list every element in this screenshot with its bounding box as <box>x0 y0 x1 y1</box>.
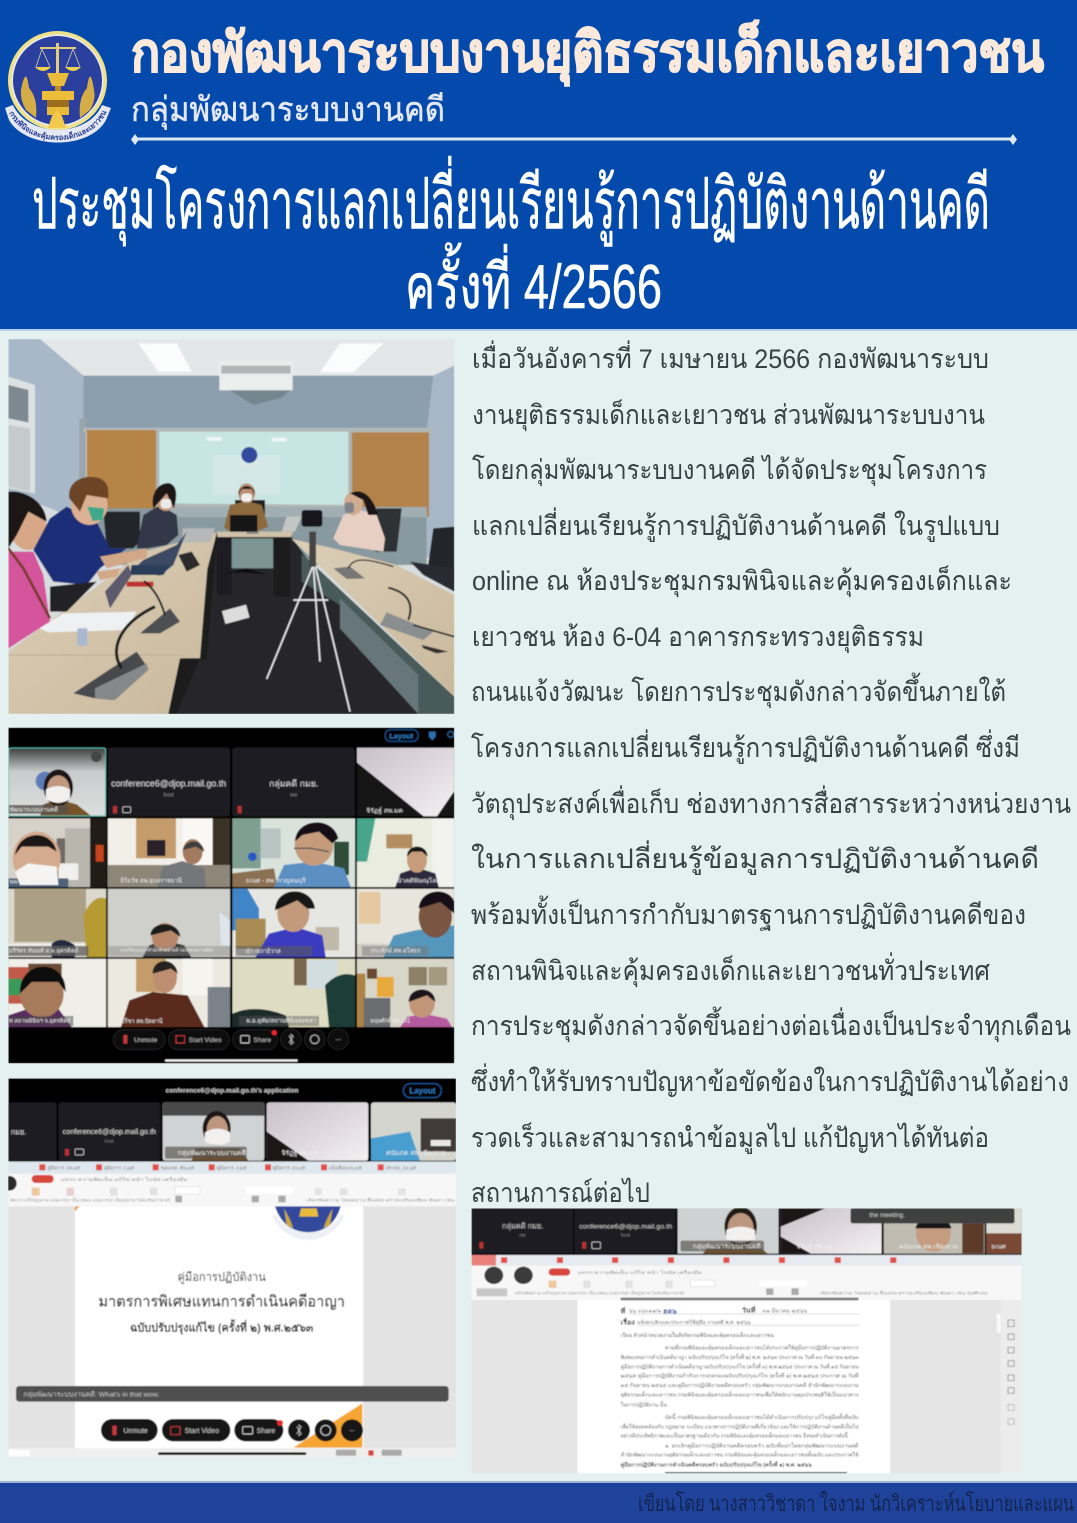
pdf toolbar <box>471 1255 1022 1300</box>
chat caption bar: กลุ่มพัฒนาระบบงานคดี: What's in that wow. <box>23 1390 159 1398</box>
body text: แลกเปลี่ยนเรียนรู้การปฏิบัติงานด้านคดี ในรูปแบบ <box>472 507 1000 542</box>
conference strip: me <box>519 1233 526 1238</box>
body text: พร้อมทั้งเป็นการกำกับมาตรฐานการปฏิบัติงานคดีของ <box>471 895 1026 931</box>
video tiles: ปรีชา สพ.ปัตตานี <box>121 1017 163 1025</box>
photo: meeting room <box>8 339 454 714</box>
body text: ถนนแจ้งวัฒนะ โดยการประชุมดังกล่าวจัดขึ้นภายใต้ <box>471 672 1006 709</box>
tile: case group: กลุ่มคดี กมย. <box>269 778 318 789</box>
call toolbar: Start Video <box>189 1037 222 1044</box>
body text: โดยกลุ่มพัฒนาระบบงานคดี ได้จัดประชุมโครงการ <box>472 455 987 487</box>
tile row 3 <box>8 888 107 958</box>
letter page: คู่มือการปฏิบัติงานการดำเนินคดีครอบครัว ฉบับปรับปรุงแก้ไข (ครั้งที่ ๑) พ.ศ. ๒๕๖๖ <box>621 1460 812 1469</box>
conference strip: กลุ่มพัฒนาระบบงานคดี <box>178 1149 246 1157</box>
video tiles: มนุษศักดิ์ สพ.101 <box>370 1016 411 1025</box>
pdf toolbar: จัดการ แก้ไขรูปภาพ แปลง PDF เป็น Office แปลง PDF เป็นรูปภาพ ไฟล์เสริมการแชร์ <box>10 1197 170 1203</box>
call toolbar: Start Video <box>185 1428 219 1435</box>
tile row 2: พพ สพ.เชียงราย <box>10 878 51 885</box>
conference strip: ธเนศ <box>991 1244 1006 1250</box>
woman right <box>333 510 385 552</box>
call toolbar <box>8 1419 456 1458</box>
pdf toolbar: คู่มือการ .03.pdf <box>273 1164 306 1171</box>
left table <box>8 532 217 714</box>
pdf toolbar: ขอบเขต .ต้น.pdf <box>161 1165 195 1170</box>
letter page: ๒๕๖๕ คู่มือการปฏิบัติงานกำกับการปกครองฉบับปรับปรุงแก้ไข (ครั้งที่ ๑) พ.ศ.๒๕๖๕ ประกาศ ณ วันที่ <box>621 1372 859 1380</box>
letter page: สำนักพัฒนาระบบงานยุติธรรมเด็กและเยาวชน กรมพินิจและคุ้มครองเด็กและเยาวชนทั้งฉบับ และประกาศใช้ <box>621 1451 859 1459</box>
tile row 3: ธรีรัตร ทันนท์ ส.พ.อุตรดิตถ์ <box>9 947 78 955</box>
right side tools <box>997 1300 1022 1473</box>
video tiles <box>8 748 454 1027</box>
letter page: อย่างมีประสิทธิภาพและเป็นมาตรฐานเดียวกัน กรมพินิจและคุ้มครองเด็กและเยาวชน จึงขอดำเนินการดังนี้ <box>621 1432 848 1440</box>
tile: case group <box>232 747 356 817</box>
call toolbar: Unmute <box>134 1037 158 1044</box>
pdf toolbar: แทรก ความคิดเห็น แก้ไข หน้า โบนัส เครื่องมือ <box>577 1268 702 1275</box>
icon: department seal logo <box>5 31 111 142</box>
letter page <box>577 1298 890 1473</box>
laptops <box>182 528 215 542</box>
video tiles: ประจักษ์ สพ ยโสธร <box>370 947 421 955</box>
video tiles: ธเนศ - สพ. กาญจนบุรี <box>246 877 306 885</box>
letter page: บัดนี้ กรมพินิจและคุ้มครองเด็กและเยาวชนได้ดำเนินการปรับปรุง แก้ไขคู่มือทั้งสี่ฉบับ <box>665 1413 859 1421</box>
pdf toolbar: แก้ไขข้อความ แก้ไขรูปภาพ แปลง PDF เป็น Office แปลง PDF เป็นรูปภาพ ไฟล์เสริมการแชร์ <box>515 1290 684 1295</box>
tripod <box>267 565 350 712</box>
letter page: แจ้งยกเลิกและประกาศใช้คู่มือ งานคดี พ.ศ. ๒๕๖๖ <box>637 1319 751 1326</box>
letter page: ๖๖ ๐๖๐๑๑/๑ <box>629 1309 661 1315</box>
tile row 4 <box>8 958 107 1028</box>
call toolbar: ... <box>349 1426 355 1433</box>
woman dark <box>137 505 178 548</box>
letter page: ในการปฏิบัติงาน นั้น <box>621 1401 667 1408</box>
letter page: เพื่อให้สอดคล้องกับ กฎหมาย ระเบียบ แนวทางการปฏิบัติงานที่เกี่ยวข้อง และให้การปฏิบัติงานด้านคดีเป็นไป <box>621 1423 859 1430</box>
pdf toolbar: เลือกข้อความ โหมดอ่าน พื้นหลัง ตรวจเปรียบเทียบ ค้นหา เน้น บันทึกย่อ <box>820 1290 987 1295</box>
conference strip: จิรัฏฐ์ สพ.มค <box>281 1149 318 1157</box>
conference strip: Layout <box>409 1087 436 1096</box>
conference strip: คนัมภค สพ เชียงราย <box>386 1149 446 1157</box>
call toolbar: Share <box>253 1037 271 1044</box>
tile: host woman <box>8 746 107 818</box>
body text: รวดเร็วและสามารถนำข้อมูลไป แก้ปัญหาได้ทันต่อ <box>471 1120 989 1154</box>
conference strip <box>8 1078 456 1162</box>
tile row 2 <box>8 818 107 888</box>
conference strip: กลุ่มคดี กมย. <box>502 1222 543 1230</box>
footer band <box>0 1481 1077 1523</box>
video tiles: ธีร์ธวัช สพ.อุบลราชธานี <box>120 877 182 885</box>
photo: screen share of manual <box>2 1078 456 1458</box>
body text: เยาวชน ห้อง 6-04 อาคารกระทรวงยุติธรรม <box>472 622 924 654</box>
video tiles: นวภพ-หัวหน้าคดีพิษณุโลก <box>365 877 440 885</box>
conference strip: conference6@djop.mail.go.th <box>579 1224 672 1230</box>
title line 2: ครั้งที่ 4/2566 <box>405 242 662 322</box>
header band <box>0 0 1077 331</box>
photo: screen share of official letter <box>471 1207 1022 1473</box>
body text: สถานการณ์ต่อไป <box>471 1177 650 1208</box>
letter page: ตามที่กรมพินิจและคุ้มครองเด็กและเยาวชนได้ประกาศใช้คู่มือการปฏิบัติงานมาตรการ <box>665 1344 858 1352</box>
conference top bar: Layout <box>389 731 414 740</box>
pdf toolbar: คู่มือการ .00.pdf <box>47 1164 80 1171</box>
tile: conference6 host: host <box>164 793 174 799</box>
letter page: เรื่อง <box>621 1317 635 1326</box>
conference strip: คนัมภค สพ.เชียงราย <box>899 1243 958 1250</box>
heading: group name: กลุ่มพัฒนาระบบงานคดี <box>131 91 445 130</box>
tile: covered camera <box>356 746 454 818</box>
letter page: ๓๑ มีนาคม ๒๕๖๖ <box>762 1308 808 1315</box>
woman centre <box>235 500 265 523</box>
conference strip <box>471 1207 1022 1255</box>
conference strip: conference6@djop.mail.go.th's application <box>166 1089 299 1095</box>
call toolbar: Unmute <box>123 1428 148 1435</box>
pdf toolbar: แจ้งเตือน 01.pdf <box>329 1164 362 1170</box>
photo: video conference gallery <box>8 728 454 1063</box>
pdf toolbar: ปช 001_01.pdf <box>385 1165 417 1170</box>
tile: case group: me <box>290 793 297 799</box>
mic right <box>380 612 433 640</box>
centre table <box>217 532 293 537</box>
man blue <box>33 507 127 585</box>
manual page: คู่มือการปฏิบัติงาน <box>177 1270 266 1285</box>
letter page: คู่มือการปฏิบัติงานการดำเนินคดีอาญาฉบับปรับปรุงแก้ไข (ครั้งที่ ๓) พ.ศ.๒๕๖๕ ประกาศ ณ วันที่ ๑๕ กันยายน <box>621 1363 859 1370</box>
manual page <box>75 1206 363 1448</box>
video tiles: นำ -นราธิวาส <box>246 948 281 955</box>
divider line with diamonds <box>131 134 1017 145</box>
body text: เมื่อวันอังคารที่ 7 เมษายน 2566 กองพัฒนาระบบ <box>472 340 989 374</box>
tile row 4: ท สถานพินิจฯ จ.อุตรดิตถ์ <box>9 1017 71 1025</box>
body text: โครงการแลกเปลี่ยนเรียนรู้การปฏิบัติงานด้านคดี ซึ่งมี <box>471 729 1020 764</box>
tile: host woman: พัฒนาระบบงานคดี <box>10 806 58 814</box>
manual page: มาตรการพิเศษแทนการดำเนินคดีอาญา <box>98 1293 345 1310</box>
letter page: ฮต๖ <box>663 1309 677 1315</box>
letter page: ที่ <box>620 1306 626 1315</box>
body text: online ณ ห้องประชุมกรมพินิจและคุ้มครองเด็กและ <box>472 563 1012 598</box>
conference strip: กลุ่มพัฒนาระบบงานคดี <box>693 1243 760 1250</box>
conference strip: host <box>621 1233 631 1238</box>
pdf toolbar <box>2 1162 456 1206</box>
call toolbar: ... <box>336 1035 341 1042</box>
chat caption bar <box>16 1386 449 1402</box>
body text: ในการแลกเปลี่ยนรู้ข้อมูลการปฏิบัติงานด้านคดี <box>471 840 1039 875</box>
pdf toolbar: แทรก ความคิดเห็น แก้ไข หน้า โบนัส เครื่องมือ <box>61 1175 188 1182</box>
tile: conference6 host: conference6@djop.mail.go.th <box>111 778 226 788</box>
conference top bar <box>385 730 454 741</box>
letter page: ๑๕ กันยายน ๒๕๖๕ และคู่มือการปฏิบัติงานคดีครอบครัว กลุ่มพัฒนาระบบงานคดี สำนักพัฒนาระบบงาน <box>621 1382 859 1389</box>
manual page: ฉบับปรับปรุงแก้ไข (ครั้งที่ ๒) พ.ศ.๒๕๖๓ <box>130 1319 314 1336</box>
call toolbar <box>113 1029 349 1062</box>
tile: covered camera: จิรัฏฐ์ สพ.มค <box>366 806 403 814</box>
body text: สถานพินิจและคุ้มครองเด็กและเยาวชนทั่วประเทศ <box>471 952 990 988</box>
letter page: ๑. ยกเลิกคู่มือการปฏิบัติงานคดีครอบครัว ฉบับที่ออกโดยกลุ่มพัฒนาระบบงานคดี <box>665 1442 859 1449</box>
call toolbar: Share <box>257 1428 275 1435</box>
woman pink <box>8 552 50 648</box>
tile: conference6 host <box>107 747 230 818</box>
video tiles: ผ.อ.อุทัย/สถานพินิจสงขลา <box>246 1018 316 1025</box>
conference strip: กมย. <box>11 1127 26 1136</box>
pdf toolbar: เลือกข้อความ โหมดอ่าน พื้นหลัง ตรวจเปรียบเทียบ ค้นหา เน้น <box>306 1198 455 1203</box>
pdf toolbar: คู่มือการ .3.pdf <box>217 1164 247 1171</box>
conference strip: conference6@djop.mail.go.th <box>63 1129 156 1136</box>
letter page: ยุติธรรมเด็กและเยาวชน กรมพินิจและคุ้มครองเด็กและเยาวชนเพื่อให้พนักงานคุมประพฤติใช้เป็นแนวทาง <box>621 1391 859 1399</box>
pdf toolbar: คู่มือการ .1.pdf <box>104 1164 135 1171</box>
body text: งานยุติธรรมเด็กและเยาวชน ส่วนพัฒนาระบบงาน <box>472 397 985 432</box>
conference strip: จิรัฏฐ์ สพ.มค <box>796 1243 833 1250</box>
conference strip: host <box>105 1139 114 1144</box>
conference strip: the meeting. <box>869 1212 905 1219</box>
letter page: วันที่ <box>742 1305 756 1315</box>
body text <box>471 340 1071 1208</box>
icon: department seal logo: กรมพินิจและคุ้มครองเด็กและเยาวชน <box>9 110 106 141</box>
letter page: เรียน หัวหน้าหน่วยงานในสังกัดกรมพินิจและคุ้มครองเด็กและเยาวชน <box>621 1331 774 1339</box>
right table <box>302 553 454 714</box>
video tiles: นายไพรเลอยาสำนักหัวหน้าคดี รอบสพ.สถานพินิจ <box>120 948 214 953</box>
mic 1 <box>73 652 148 700</box>
letter page: พิเศษแทนการดำเนินคดีอาญา ฉบับปรับปรุงแก้ไข (ครั้งที่ ๒) พ.ศ. ๒๕๖๓ ประกาศ ณ วันที่ ๓๐ กันยายน ๒๕๖๓ <box>620 1353 859 1361</box>
